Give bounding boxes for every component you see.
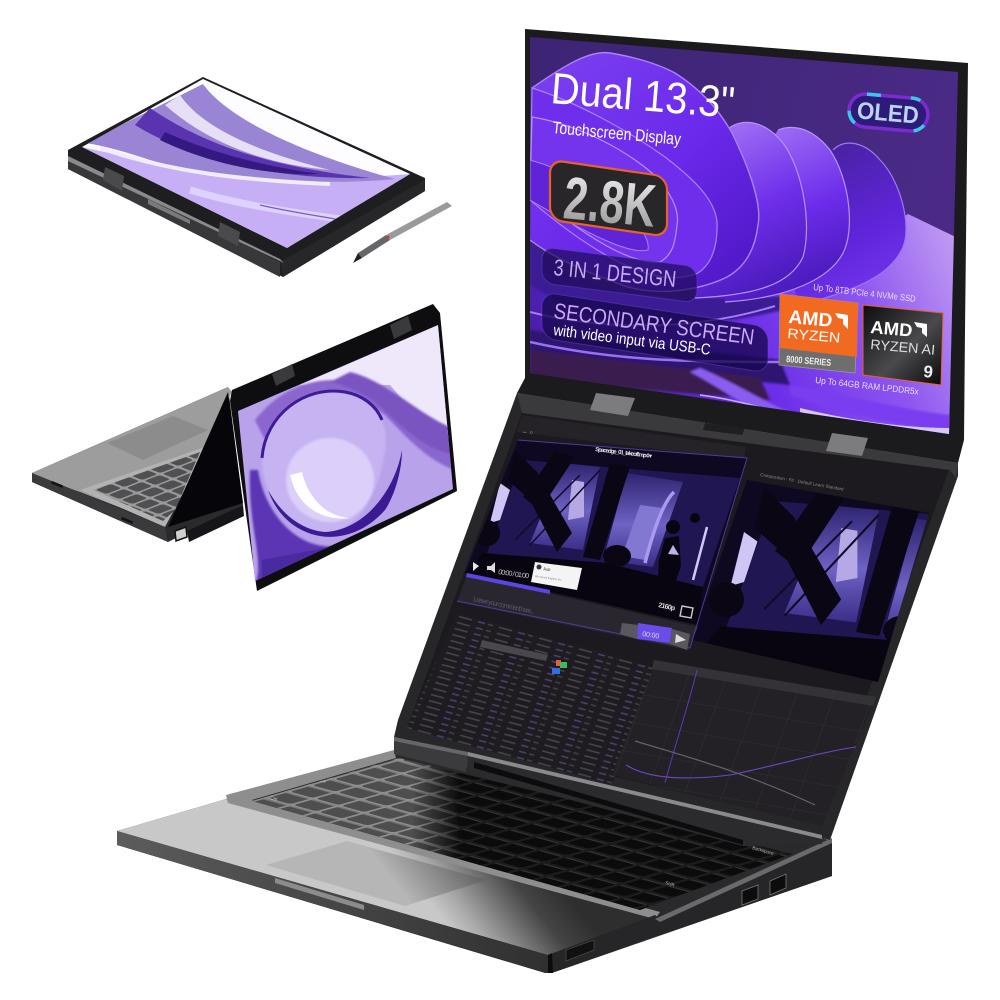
memory spec: Up To 64GB RAM LPDDR5x <box>815 375 920 397</box>
comment panel <box>457 575 698 650</box>
laptop base top deck <box>117 750 832 973</box>
keyboard key legends: Enter <box>722 878 734 886</box>
secondary screen pill <box>542 292 768 373</box>
AMD Ryzen 8000 series badge: RYZEN <box>787 325 841 346</box>
keyboard key legends: Ctrl <box>270 795 278 802</box>
upper hinge bar <box>517 393 958 478</box>
lower screen body <box>394 393 958 840</box>
small tablet mode device <box>60 70 452 277</box>
comment input: Leave your comment here... <box>473 596 535 616</box>
fullscreen icon <box>680 606 693 618</box>
keyboard key legends: Shift <box>665 880 675 888</box>
USB ports <box>742 874 786 905</box>
secondary screen pill: SECONDARY SCREEN <box>552 298 756 350</box>
OLED badge <box>848 93 929 132</box>
keyboard key legends: Caps Lock <box>305 773 327 784</box>
secondary screen pill: with video input via USB-C <box>552 322 711 359</box>
timecode buttons: 00:00 <box>642 631 660 640</box>
keyboard key legends: Backspace <box>752 845 775 856</box>
tent screen frame and hinge <box>230 304 457 591</box>
storage spec: Up To 8TB PCIe 4 NVMe SSD <box>813 282 917 304</box>
tent black back panel <box>168 392 243 527</box>
keyboard key legends <box>270 773 775 888</box>
upper display frame <box>517 29 968 463</box>
small tent mode device <box>32 304 460 591</box>
hinge right <box>826 433 868 456</box>
comment popup <box>531 562 582 590</box>
player controls: 00:00 / 01:00 <box>498 569 529 580</box>
AMD Ryzen AI 9 badge: AMD <box>870 317 913 341</box>
panel outline <box>457 440 747 648</box>
tent wallpaper <box>238 325 453 581</box>
lobes <box>794 144 906 298</box>
composition header: Composition · Fit · Default Learn Standard <box>760 472 844 492</box>
AMD Ryzen 8000 series badge: AMD <box>788 307 833 332</box>
comment popup: Just <box>543 566 552 572</box>
AMD Ryzen 8000 series badge <box>779 294 858 373</box>
tablet wallpaper <box>82 79 410 248</box>
hinge left <box>590 393 635 416</box>
2.8K badge: 2.8K <box>561 164 659 240</box>
selected rows <box>480 640 548 661</box>
2.8K badge <box>550 160 667 240</box>
wallpaper <box>520 30 965 440</box>
keyboard <box>252 758 792 910</box>
touchpad <box>266 841 487 906</box>
lower screen panel <box>407 413 949 825</box>
3 in 1 design pill: 3 IN 1 DESIGN <box>553 254 677 292</box>
graph editor <box>612 660 876 826</box>
resolution label: 2160p <box>658 602 676 612</box>
toolbar: ← ⌕ <box>522 429 533 436</box>
OLED badge: OLED <box>856 97 920 130</box>
tent side ports <box>175 505 244 542</box>
lower keyboard hinge <box>394 737 822 846</box>
AMD Ryzen AI 9 badge: RYZEN AI <box>870 336 936 358</box>
timecode buttons <box>620 623 690 650</box>
video panel left <box>465 440 746 624</box>
AMD Ryzen 8000 series badge: 8000 SERIES <box>786 354 832 369</box>
colored labels <box>552 660 567 674</box>
tablet body <box>68 77 425 277</box>
player controls <box>466 562 550 594</box>
file title: Spacedge_01_takeoff.mp4 ▾ <box>595 447 653 460</box>
lower OLED screen <box>394 393 1000 840</box>
3 in 1 design pill <box>542 247 697 303</box>
speaker vent <box>566 940 594 961</box>
AMD Ryzen AI 9 badge: 9 <box>923 362 934 382</box>
stylus pen <box>353 202 452 263</box>
toolbar <box>517 415 746 460</box>
upper display <box>517 29 968 463</box>
AMD Ryzen AI 9 badge <box>863 305 943 385</box>
subtitle: touchscreen display: Touchscreen Display <box>552 118 682 149</box>
video panel right <box>693 480 929 682</box>
comment popup: We should brighten the <box>535 574 562 582</box>
tent keyboard base <box>32 387 243 542</box>
title: Dual 13.3: Dual 13.3" <box>549 64 737 128</box>
layers table <box>407 613 654 785</box>
